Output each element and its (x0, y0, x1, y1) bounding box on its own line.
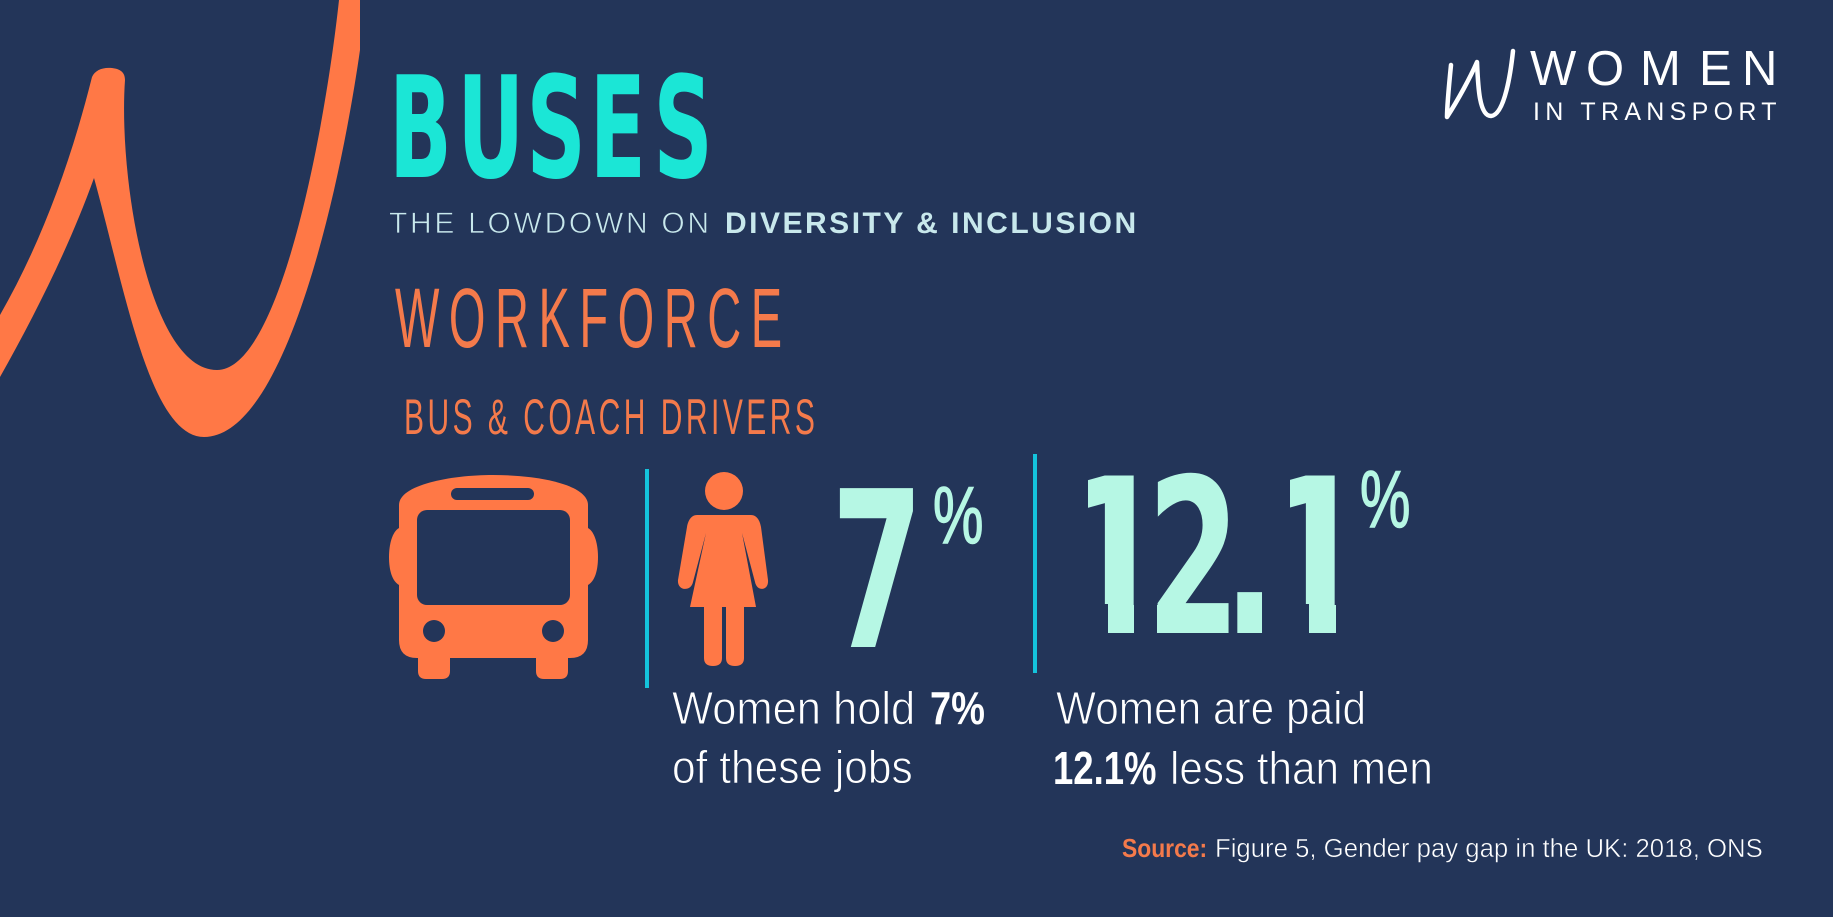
stat: 12.1 percent (1055, 433, 1410, 685)
icon: woman (678, 472, 768, 666)
stat label: women hold 7 percent: 7% (930, 683, 985, 734)
stat label: women hold 7 percent: of these jobs (672, 742, 913, 793)
logo wordmark: WOMEN (1530, 42, 1777, 96)
logo: women in transport (1447, 42, 1782, 126)
stat: 7 percent: % (933, 470, 983, 560)
stat label: women are paid less: less than men (1170, 743, 1433, 794)
section heading: workforce: WORKFORCE (395, 272, 792, 366)
stat label: women are paid less: 12.1% (1053, 742, 1157, 794)
source note: Source: (1122, 835, 1207, 863)
stat label: women are paid less: Women are paid (1056, 683, 1366, 734)
subtitle: DIVERSITY & INCLUSION (725, 207, 1139, 240)
logo tagline: IN TRANSPORT (1533, 98, 1782, 126)
stat: 12.1 percent: 1 (1059, 434, 1172, 685)
stat label: women are paid less (1053, 683, 1433, 794)
stat: 12.1 percent: % (1360, 454, 1410, 544)
source note: Figure 5, Gender pay gap in the UK: 2018, ONS (1215, 835, 1763, 863)
icon: logo W (1447, 51, 1513, 117)
subtitle: THE LOWDOWN ON (389, 207, 712, 240)
decorative brand W swoosh (0, 0, 360, 437)
sub-heading: bus and coach drivers: BUS & COACH DRIVERS (404, 389, 818, 445)
stat: 7 percent: 7 (831, 444, 924, 699)
stat: 12.1 percent: 2 (1147, 433, 1240, 685)
title: BUSES (389, 48, 713, 211)
stat label: women hold 7 percent (672, 683, 985, 793)
stat: 12.1 percent: 1 (1260, 434, 1373, 685)
stat label: women hold 7 percent: Women hold (672, 683, 915, 734)
divider one (645, 469, 649, 688)
stat: 7 percent (831, 444, 983, 699)
divider two (1033, 454, 1037, 673)
stat: 12.1 percent: . (1223, 433, 1276, 684)
icon: bus (389, 475, 598, 679)
